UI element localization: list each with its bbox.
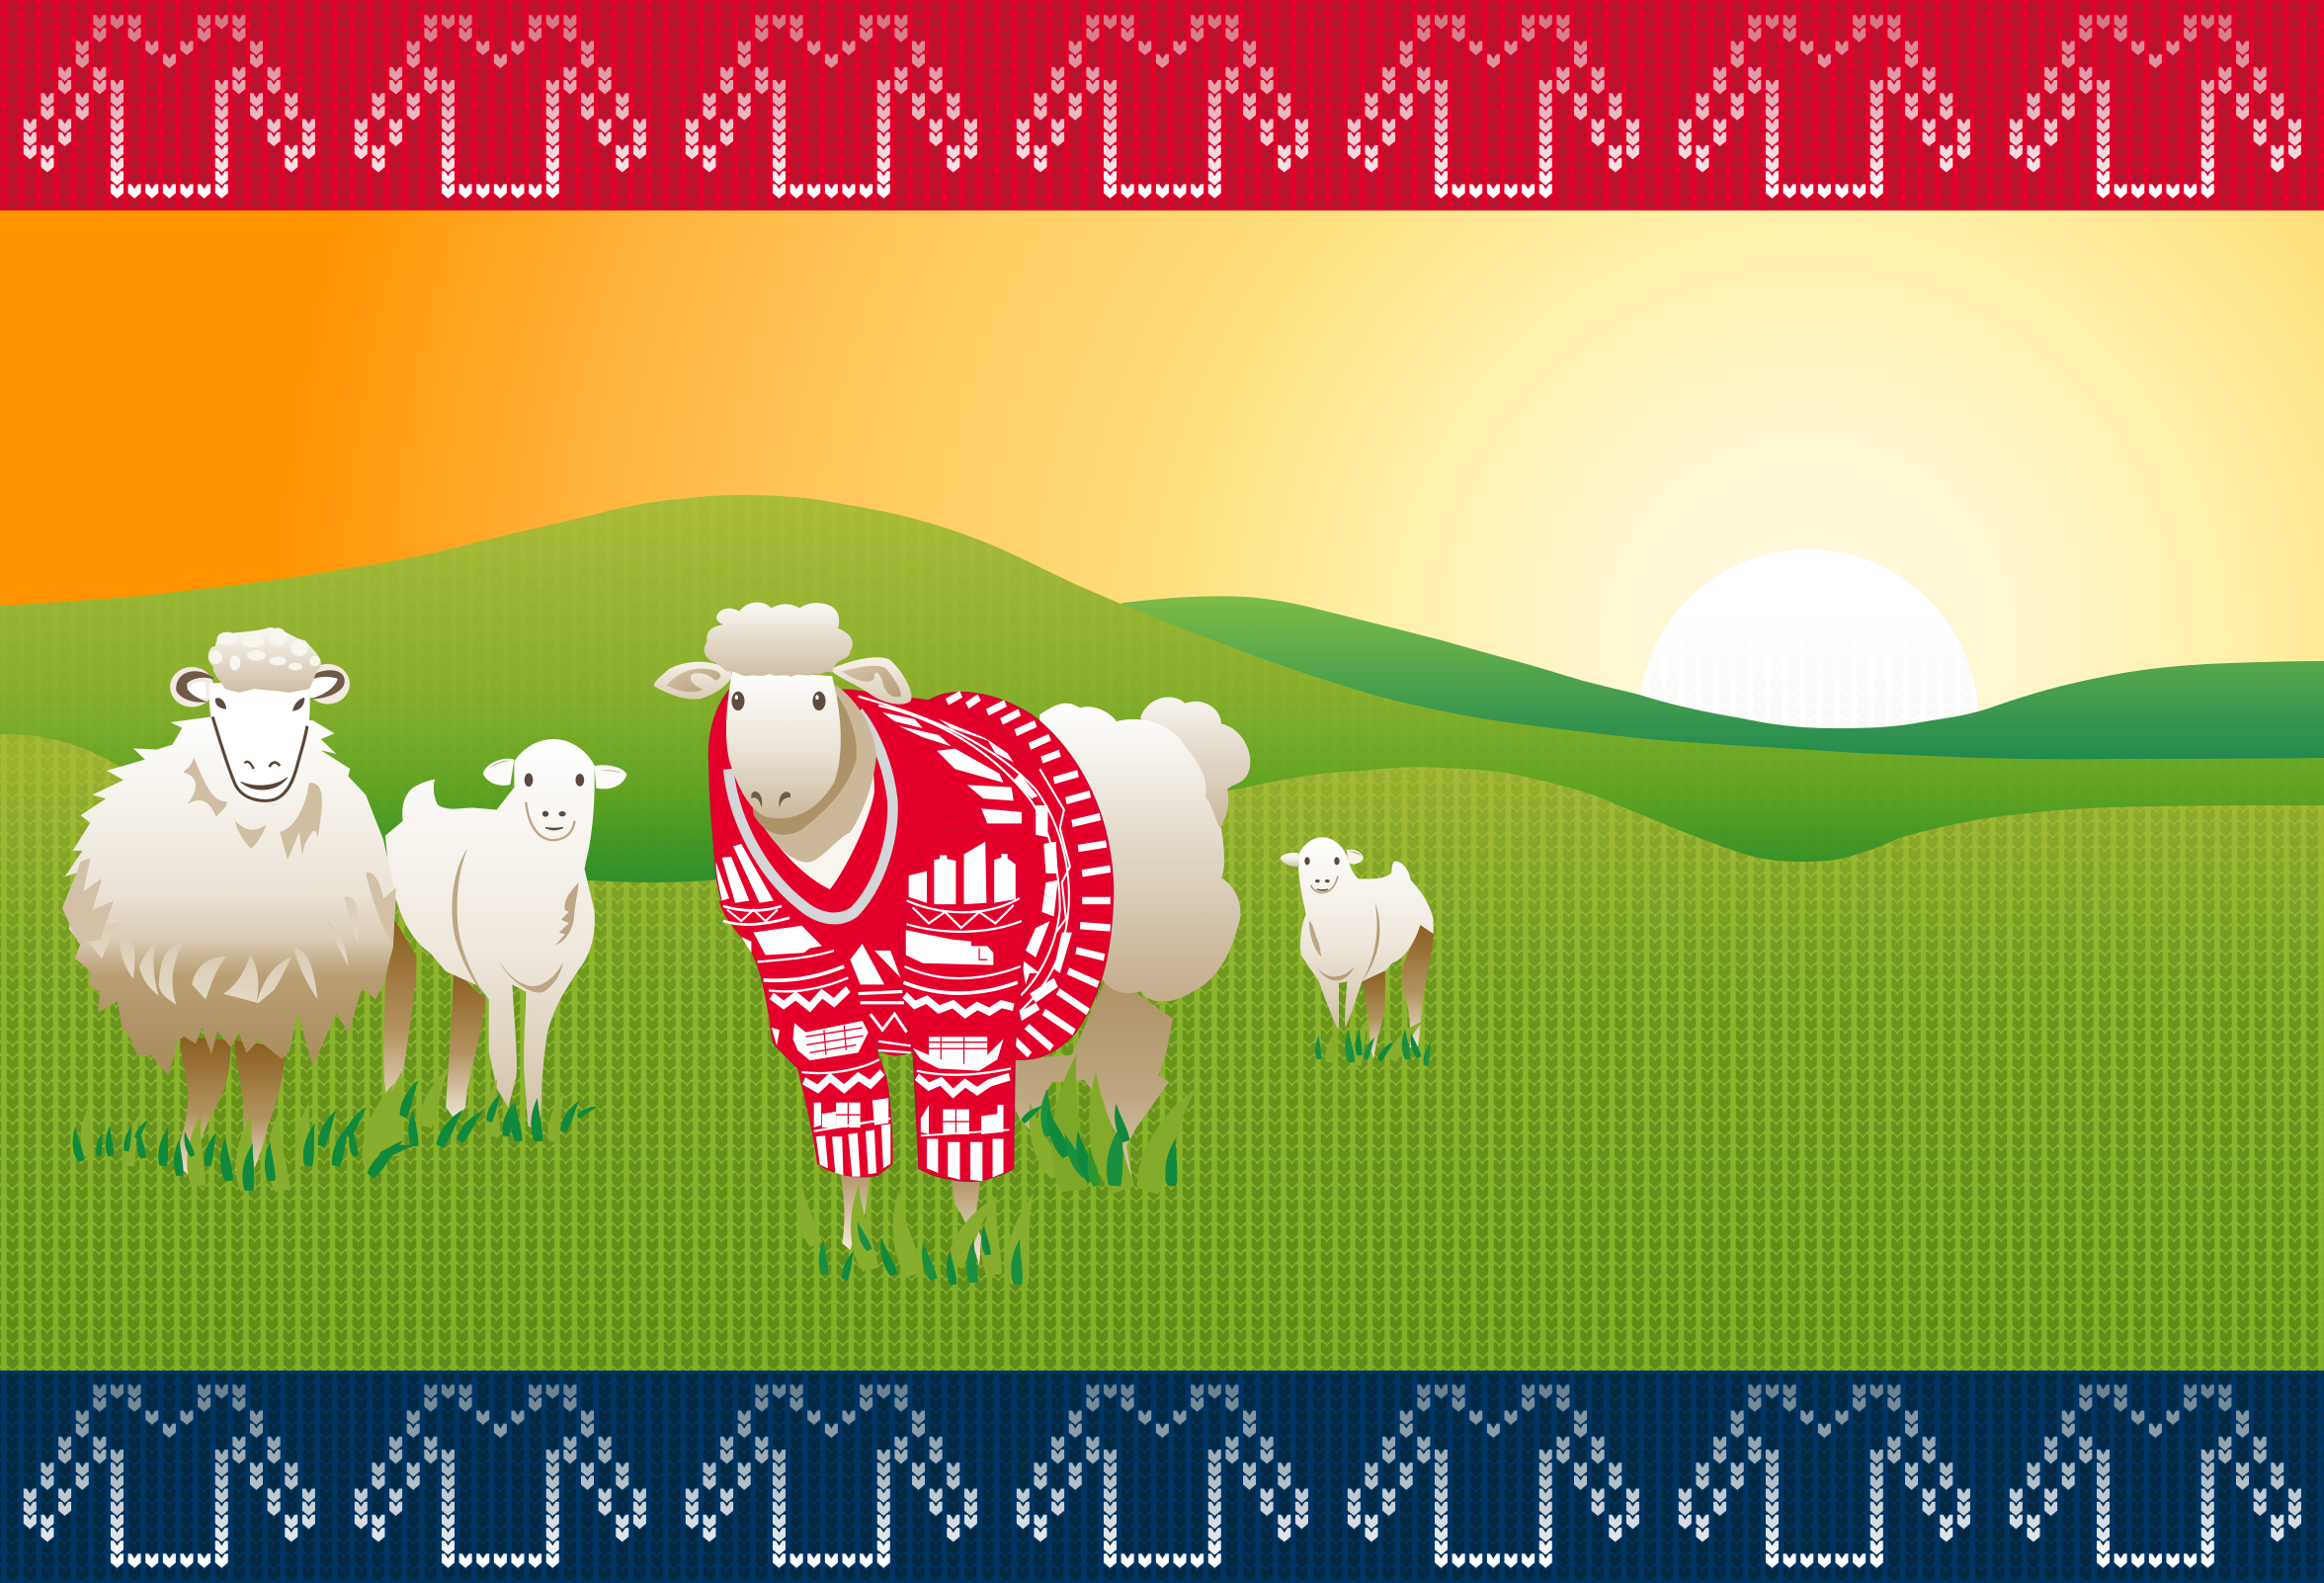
grass around left sheep and lamb [69, 1062, 598, 1193]
body wool [1036, 704, 1241, 1002]
curly head wool [208, 627, 321, 693]
sheep ears [170, 664, 350, 708]
white chest in neck opening [762, 706, 874, 889]
centre sheep wearing the red sweater [654, 602, 1250, 1266]
sheep ears [654, 657, 911, 705]
neck shadow [753, 685, 876, 863]
grass tuft at small lamb [1314, 1014, 1433, 1066]
knitted foreground meadow [0, 734, 2324, 1374]
left front leg of sweater [719, 900, 893, 1176]
fleece tufts [86, 896, 359, 1005]
right front leg of sweater [902, 828, 1025, 1180]
front leg stubs [840, 1173, 981, 1266]
fleece side shading [62, 858, 396, 944]
sheep face [208, 680, 310, 801]
shaggy fleece [62, 716, 396, 1075]
right leg pattern: skyline, truck, ship and forklifts [903, 842, 1022, 1181]
sweater body [708, 690, 1078, 1182]
lamb face [525, 774, 584, 840]
grass behind centre sheep [1012, 1054, 1197, 1196]
dark green blades [69, 1078, 598, 1191]
small lamb at right [1281, 837, 1434, 1059]
sky with sunrise glow [0, 208, 2324, 899]
grass in front of centre sheep [786, 1182, 1034, 1286]
sweater rump ribbing [929, 692, 1114, 1060]
sheep eyes and nostrils [731, 692, 826, 807]
left adult sheep [62, 627, 396, 1182]
bottom navy knitted band [0, 1371, 2324, 1583]
sheep head [726, 669, 841, 818]
neck wrinkles [184, 758, 322, 860]
top red knitted band [0, 0, 2324, 210]
far dark green hill [1087, 596, 2324, 791]
pattern on chest and left leg [715, 844, 911, 1177]
large green hill [0, 495, 2324, 909]
lamb body creases [452, 849, 579, 996]
lamb ears [483, 759, 626, 789]
olive blades [76, 1062, 564, 1193]
lamb hind legs [383, 918, 486, 1123]
top knot of wool [705, 602, 853, 677]
lamb beside the left sheep [383, 739, 626, 1133]
sweater flank pattern [882, 712, 1072, 1021]
muzzle shadow [749, 697, 857, 835]
lamb body and head [385, 739, 595, 1133]
rear wool [1140, 698, 1250, 830]
belly and hind legs [1014, 973, 1173, 1182]
sheep legs [174, 1037, 286, 1182]
sweater neck rim [728, 712, 892, 918]
sun [1640, 549, 1978, 728]
sheep face outline and features [212, 698, 307, 800]
